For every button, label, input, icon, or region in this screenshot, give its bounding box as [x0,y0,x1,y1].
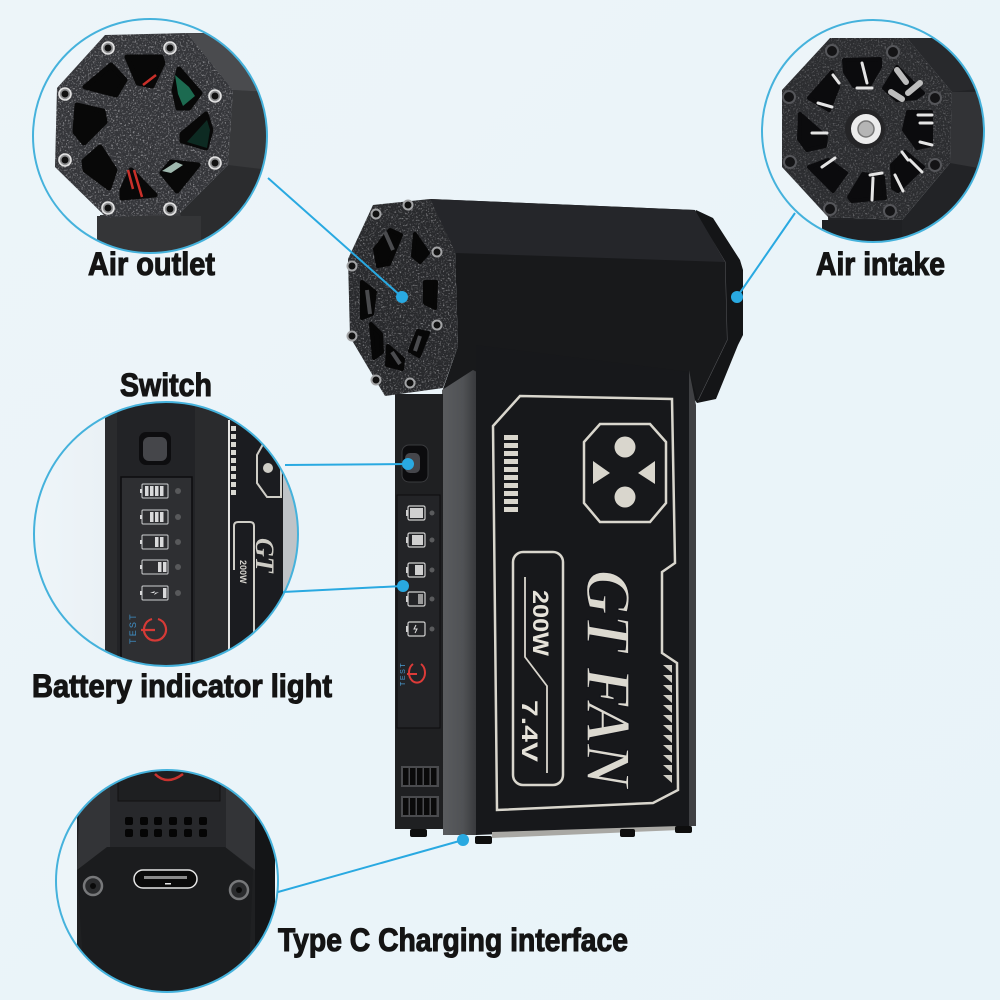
device: power rating badge [513,552,563,785]
heading: Type C Charging interface: Type C Charging interface [278,922,628,958]
device: octagon logo [584,424,666,522]
device: front outlet grille [345,195,461,399]
device: front face [476,345,692,835]
callout arrow: switch [285,458,414,470]
air outlet grille [50,30,240,220]
screws [84,877,248,899]
device: triangle strip [663,665,672,783]
device: GT FAN wordmark: GT FAN [573,570,644,791]
device: right head cap [680,210,743,403]
USB-C port [134,870,197,888]
indicator LEDs [175,488,181,596]
panel: air intake detail circle [762,20,990,250]
device: TEST label: TEST [400,662,407,686]
device: bottom edge [410,826,692,844]
air intake grille with fan blades [778,32,956,222]
switch button [139,432,171,465]
heading: Switch: Switch [120,367,212,403]
device: head body [430,199,727,400]
device: battery icons [406,506,425,636]
callout arrow: air outlet [268,178,408,303]
heading: Air outlet: Air outlet [88,246,215,282]
panel: type C port detail circle [56,765,278,992]
main product: GT FAN device [345,195,743,844]
vent holes [125,817,207,837]
power icon [141,619,166,641]
device: switch [402,445,428,482]
device: side strip [442,370,477,835]
stripe marks [231,426,236,495]
device: label outline [493,396,678,810]
device: head top facet [430,199,725,262]
callout arrow: battery indicator [283,580,409,592]
battery level icons [140,484,168,600]
callout arrow: air intake [731,213,795,303]
device: battery panel [397,495,440,728]
label: 200W on device: 200W [238,560,248,584]
heading: Air intake: Air intake [816,246,945,282]
panel: switch and battery detail circle [34,400,299,677]
device: power rating badge: 200W [528,590,553,656]
device: power icon [407,664,425,683]
TEST label: TEST [128,612,138,644]
device: control strip [395,394,443,829]
device: vents [401,766,439,817]
heading: Battery indicator light: Battery indicator light [32,668,332,704]
device: stripe marks [504,435,518,512]
panel: air outlet detail circle [33,19,280,260]
label: GT text on device: GT [250,538,279,574]
device: LEDs [430,510,434,632]
device: power rating badge: 7.4V [517,700,542,762]
callout arrow: type C [278,834,469,892]
